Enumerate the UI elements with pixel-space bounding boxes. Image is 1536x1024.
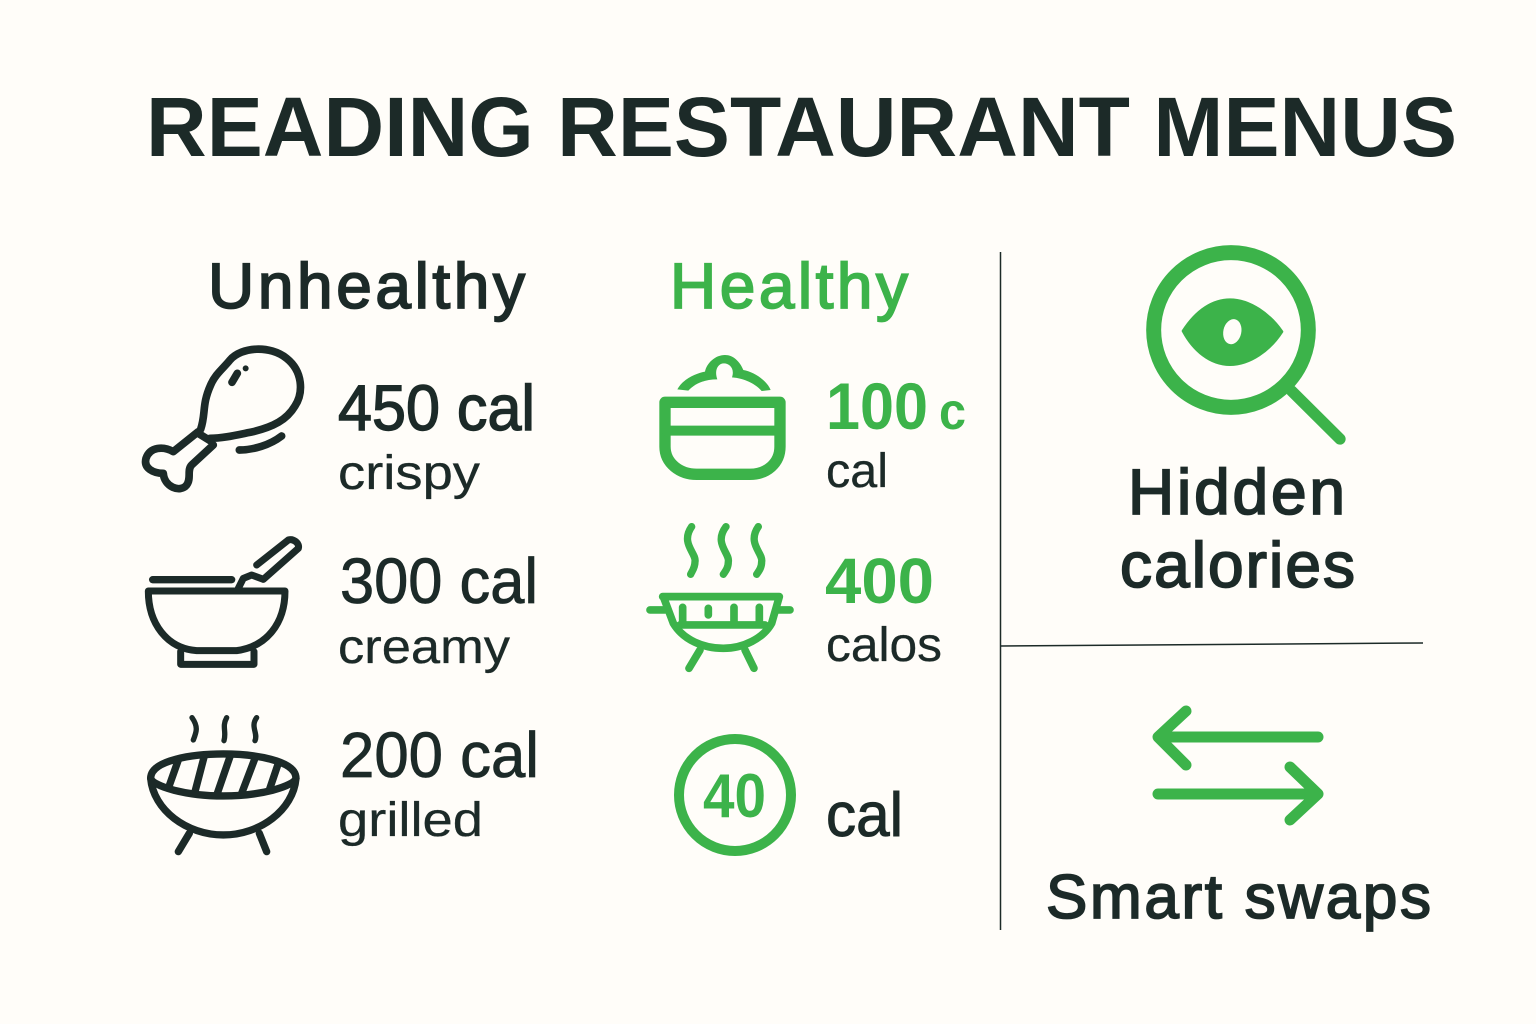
calories: 450 crispy: 450 cal — [338, 372, 535, 444]
icon: charcoal grill — [151, 718, 296, 852]
label: hidden calories — [1120, 456, 1355, 601]
calories: 200 grilled: 200 cal — [340, 719, 539, 791]
panel: healthy column — [650, 250, 966, 851]
calories: 100: cal — [826, 445, 888, 498]
heading: unhealthy: Unhealthy — [208, 250, 525, 322]
panel: unhealthy column — [146, 250, 539, 852]
heading: healthy: Healthy — [670, 250, 908, 322]
calories: 300 creamy: 300 cal — [340, 545, 538, 617]
calories: 400 — [825, 545, 942, 672]
calories: 400: 400 — [825, 545, 934, 617]
panel: hidden calories — [1120, 253, 1355, 601]
icon: bowl with spoon — [148, 540, 299, 664]
icon: green grill with steam — [650, 527, 790, 668]
calories: 100 — [826, 369, 966, 498]
icon: 40 badge: 40 — [703, 762, 766, 831]
label: hidden calories: calories — [1120, 529, 1355, 601]
calories: 100: 100 — [826, 369, 928, 443]
icon: 40 badge — [679, 739, 791, 851]
calories: 200 grilled — [338, 719, 539, 847]
panel: smart swaps — [1046, 711, 1431, 932]
calories: 300 creamy — [338, 545, 538, 674]
icon: swap arrows — [1158, 711, 1318, 820]
icon: chicken drumstick — [146, 349, 300, 489]
calories: 300 creamy: creamy — [338, 621, 510, 674]
calories: cal: cal — [826, 781, 903, 850]
calories: 200 grilled: grilled — [338, 794, 483, 847]
vertical divider — [1000, 252, 1002, 930]
icon: lidded pot — [665, 355, 780, 474]
calories: 450 crispy: crispy — [338, 447, 480, 500]
calories: 100: c — [939, 383, 966, 441]
label: smart swaps: Smart swaps — [1046, 863, 1431, 932]
icon: magnifier with eye — [1154, 253, 1340, 439]
calories: 400: calos — [826, 619, 942, 672]
calories: 450 crispy — [338, 372, 535, 500]
label: hidden calories: Hidden — [1128, 456, 1345, 528]
horizontal divider — [1001, 643, 1423, 646]
title: READING RESTAURANT MENUS — [146, 80, 1457, 174]
